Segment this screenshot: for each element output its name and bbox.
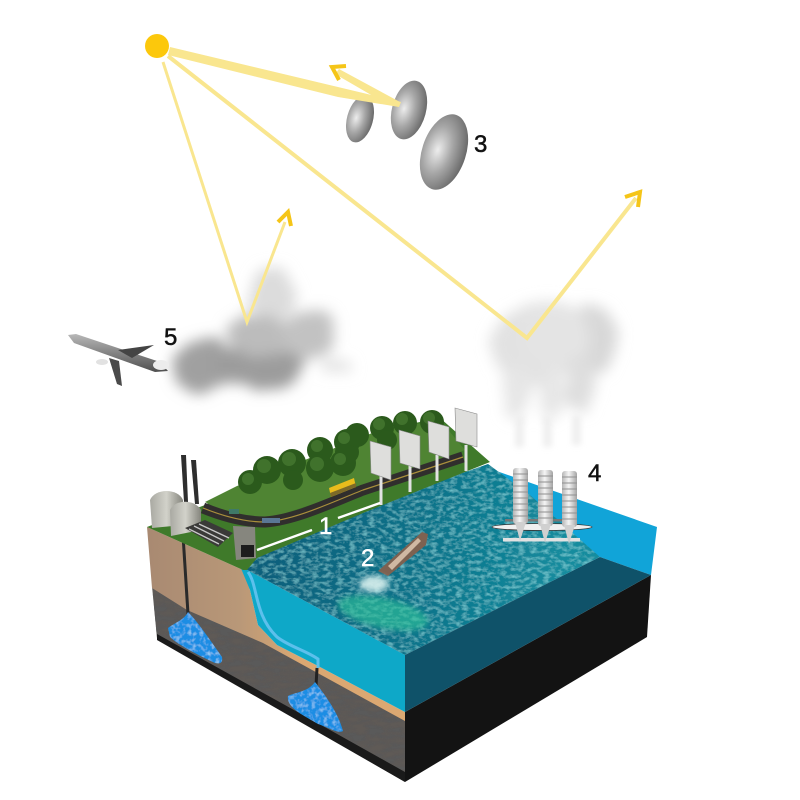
engines and tail xyxy=(96,359,108,365)
labels: 5 xyxy=(164,324,177,351)
power plant xyxy=(150,455,256,560)
school bus xyxy=(329,478,356,497)
labels: 4 xyxy=(588,460,601,487)
mirror medium xyxy=(385,77,433,143)
seabed pipe xyxy=(248,572,318,668)
cars xyxy=(229,509,280,523)
reflected ray from mirrors xyxy=(335,69,400,103)
aquifers xyxy=(168,612,343,732)
back side water xyxy=(488,468,657,575)
tower ridges xyxy=(513,474,577,519)
smoke plumes xyxy=(515,415,581,447)
fuselage xyxy=(68,334,168,372)
water surface and right side xyxy=(240,464,657,712)
grass land xyxy=(147,418,490,570)
wave-making platforms xyxy=(492,468,592,544)
plant building xyxy=(185,520,233,547)
right aquifer xyxy=(288,682,343,732)
cloud left xyxy=(173,268,352,392)
mirrors xyxy=(341,77,477,196)
well pipe xyxy=(183,535,188,614)
arrowheads xyxy=(278,66,640,226)
pipe into lower aquifer xyxy=(316,668,317,686)
cloud right xyxy=(491,301,618,418)
panels xyxy=(370,408,477,480)
shore land xyxy=(147,418,490,570)
left aquifer xyxy=(168,612,222,663)
ground block xyxy=(147,527,651,782)
black base right face xyxy=(405,575,651,782)
ray to left cloud xyxy=(163,62,285,322)
storage tanks xyxy=(150,491,201,536)
road xyxy=(203,457,463,522)
seabed bright patch xyxy=(335,589,431,637)
airplane xyxy=(68,334,169,386)
sun xyxy=(145,34,169,58)
ray to mirrors xyxy=(168,47,401,107)
mirror small xyxy=(341,92,379,146)
spiral towers xyxy=(513,468,577,544)
dark bottom edge xyxy=(157,634,405,782)
labels: 3 xyxy=(474,131,487,158)
water top surface xyxy=(240,464,600,655)
rock layer front face xyxy=(152,586,405,782)
trees xyxy=(238,410,444,494)
posts xyxy=(381,445,466,505)
ray to right cloud xyxy=(168,56,636,338)
billboards xyxy=(370,408,477,505)
mirror large xyxy=(411,108,477,196)
right face water xyxy=(405,557,651,712)
labels xyxy=(164,131,601,572)
callout line 1 xyxy=(257,503,380,550)
ship xyxy=(359,532,428,592)
labels: 2 xyxy=(361,545,374,572)
chimneys xyxy=(181,455,199,504)
soil layer xyxy=(147,527,405,721)
wings xyxy=(118,345,154,358)
water front cross-section xyxy=(240,566,405,712)
sunlight rays xyxy=(163,47,636,338)
labels: 1 xyxy=(319,513,332,540)
intake structure xyxy=(233,526,256,560)
